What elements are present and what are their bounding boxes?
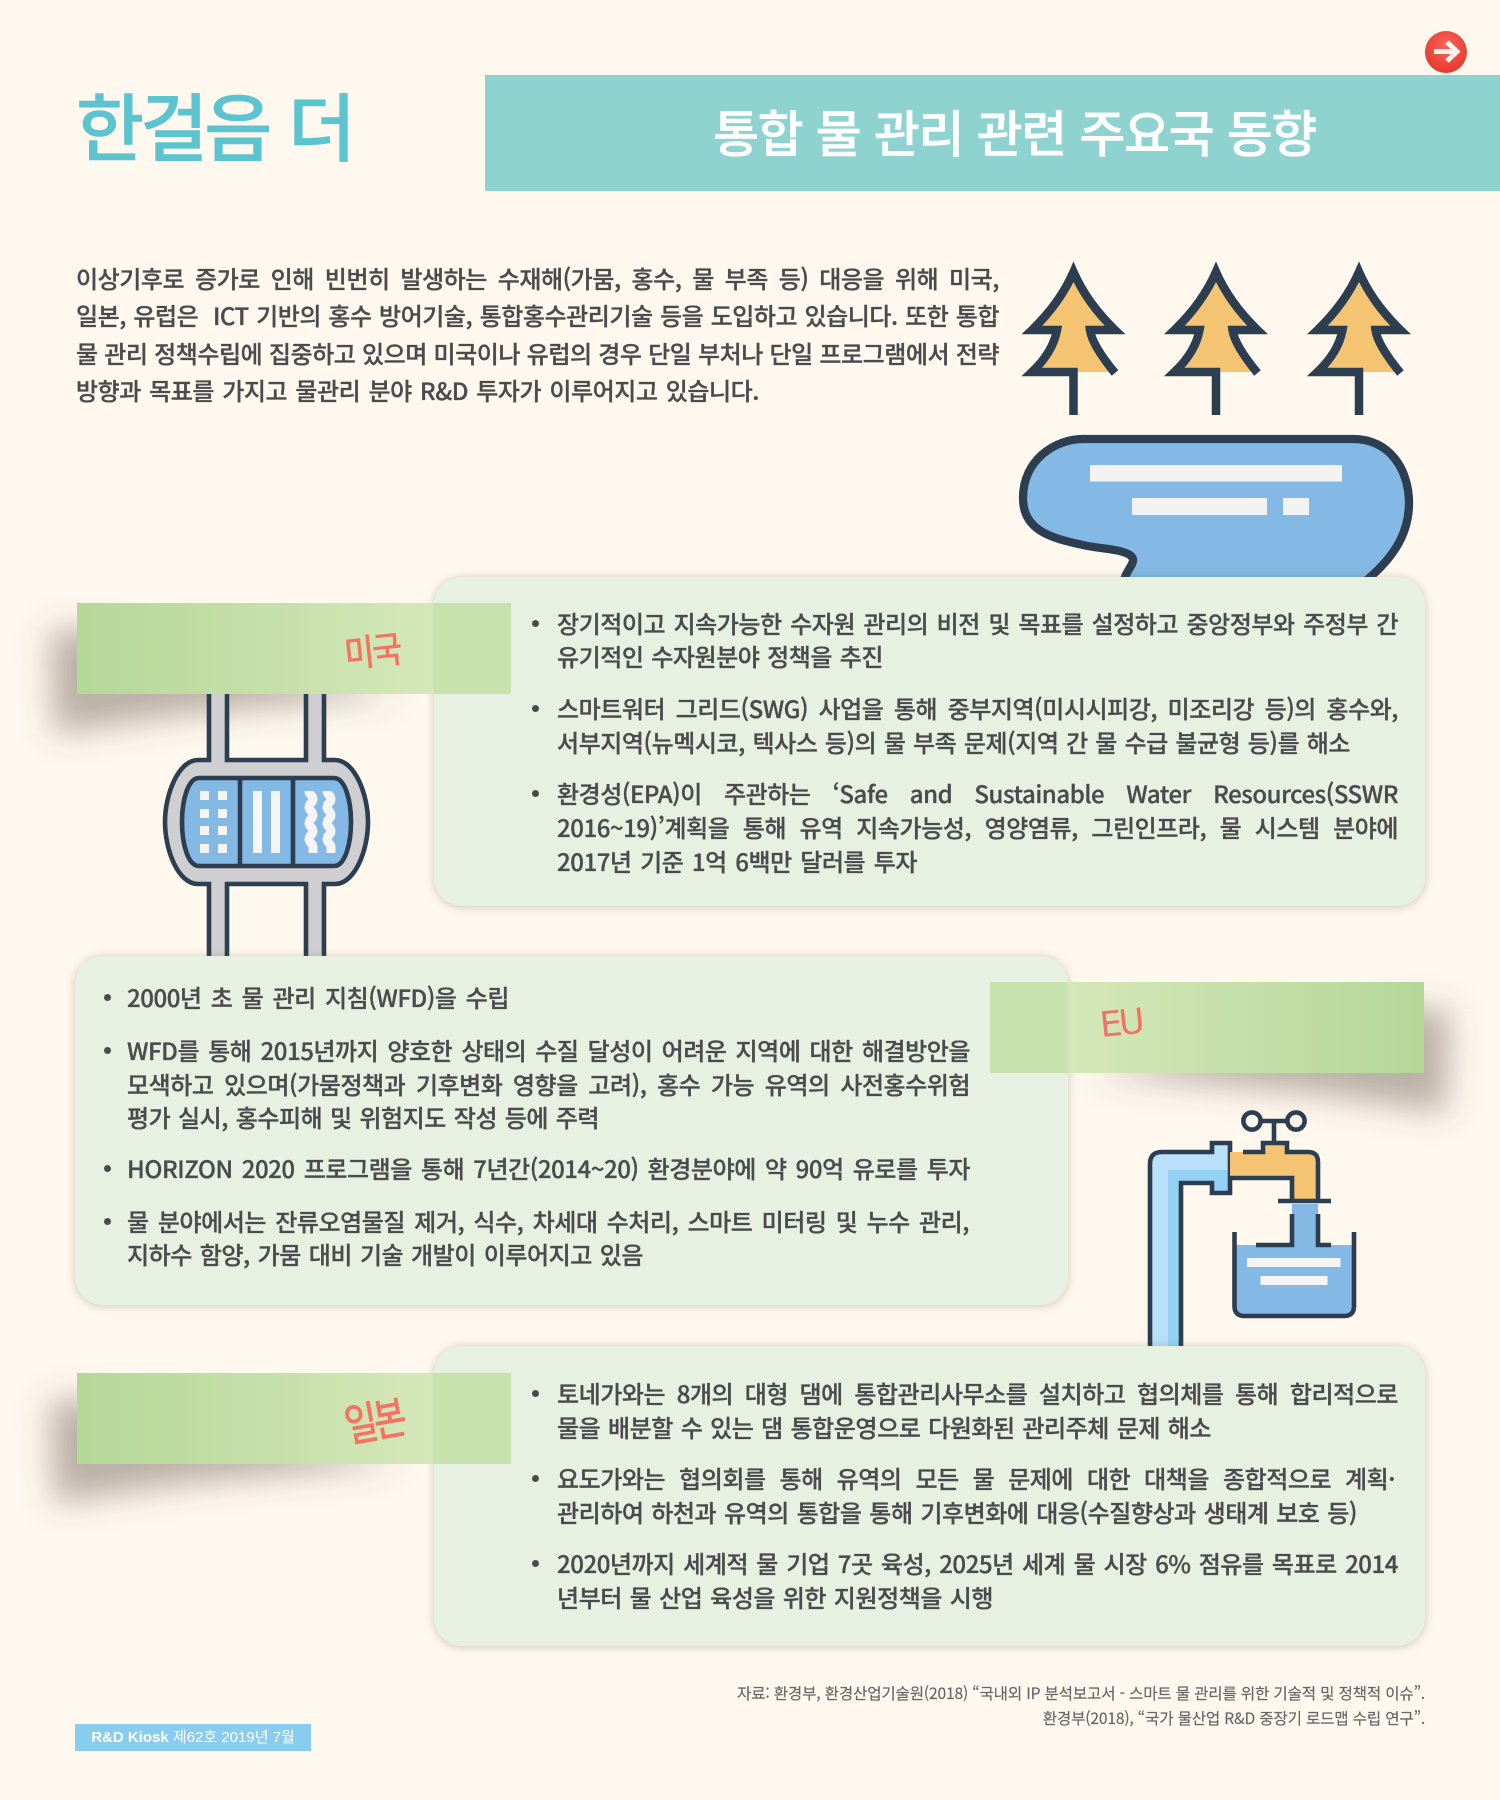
Japan bullet 1: 토네가와는 8개의 대형 댐에 통합관리사무소를 설치하고 협의체를 통해 합리적으로 — [557, 1375, 1398, 1410]
EU bullet 3: HORIZON 2020 프로그램을 통해 7년간(2014~20) 환경분야에 약 90억 유로를 투자 — [127, 1150, 970, 1185]
Japan bullet 3: 2020년까지 세계적 물 기업 7곳 육성, 2025년 세계 물 시장 6% 점유를 목표로 2014 — [557, 1545, 1398, 1580]
ribbon shadow: EU — [1090, 1009, 1450, 1113]
intro text: 방향과 목표를 가지고 물관리 분야 R&D 투자가 이루어지고 있습니다. — [76, 372, 759, 407]
USA bullet 1: 장기적이고 지속가능한 수자원 관리의 비전 및 목표를 설정하고 중앙정부와 주정부 간 — [557, 605, 1398, 640]
USA bullet 2 — [532, 690, 1398, 759]
USA bullet 3: 2017년 기준 1억 6백만 달러를 투자 — [557, 843, 917, 878]
Japan bullet 2: 관리하여 하천과 유역의 통합을 통해 기후변화에 대응(수질향상과 생태계 보호 등) — [557, 1494, 1357, 1529]
label: Japan: 일본 — [339, 1382, 407, 1456]
ribbon: Japan — [77, 1373, 511, 1464]
ribbon: EU — [990, 982, 1424, 1073]
USA bullet 2: 스마트워터 그리드(SWG) 사업을 통해 중부지역(미시시피강, 미조리강 등)의 홍수와, — [557, 690, 1398, 725]
USA bullet 1 — [532, 605, 1398, 673]
label: USA: 미국 — [341, 619, 402, 679]
EU bullet 2: WFD를 통해 2015년까지 양호한 상태의 수질 달성이 어려운 지역에 대한 해결방안을 — [127, 1032, 970, 1067]
intro text: 이상기후로 증가로 인해 빈번히 발생하는 수재해(가뭄, 홍수, 물 부족 등) 대응을 위해 미국, — [76, 260, 999, 295]
Japan bullet 1: 물을 배분할 수 있는 댐 통합운영으로 다원화된 관리주체 문제 해소 — [557, 1409, 1211, 1444]
EU bullet 2: 모색하고 있으며(가뭄정책과 기후변화 영향을 고려), 홍수 가능 유역의 사전홍수위험 — [127, 1066, 970, 1101]
USA bullet 3: 2016~19)’계획을 통해 유역 지속가능성, 영양염류, 그린인프라, 물 시스템 분야에 — [557, 809, 1398, 844]
USA bullet 1: 유기적인 수자원분야 정책을 추진 — [557, 638, 883, 673]
source note — [737, 1682, 1425, 1729]
Japan bullet 2 — [532, 1460, 1395, 1529]
intro text — [76, 260, 999, 407]
header band — [485, 75, 1500, 191]
source note: 자료: 환경부, 환경산업기술원(2018) “국내외 IP 분석보고서 - 스마트 물 관리를 위한 기술적 및 정책적 이슈”. — [737, 1682, 1425, 1704]
EU bullet 2: 평가 실시, 홍수피해 및 위험지도 작성 등에 주력 — [127, 1099, 599, 1134]
ribbon shadow: USA — [50, 630, 400, 734]
icon: next arrow — [1425, 31, 1467, 73]
Japan bullet 2: 요도가와는 협의회를 통해 유역의 모든 물 문제에 대한 대책을 종합적으로 계획· — [557, 1460, 1395, 1495]
USA bullet 2: 서부지역(뉴멕시코, 텍사스 등)의 물 부족 문제(지역 간 물 수급 불균형 등)를 해소 — [557, 724, 1350, 759]
panel: EU — [75, 956, 1068, 1305]
intro text: 일본, 유럽은 ICT 기반의 홍수 방어기술, 통합홍수관리기술 등을 도입하고 있습니다. 또한 통합 — [76, 297, 999, 332]
icon: faucet and tank — [1150, 1112, 1354, 1350]
issue badge: R&D Kiosk 제62호 2019년 7월 — [91, 1729, 295, 1746]
panel: USA — [434, 577, 1425, 906]
Japan bullet 3 — [532, 1545, 1398, 1614]
EU bullet 2 — [104, 1032, 970, 1134]
EU bullet 4: 물 분야에서는 잔류오염물질 제거, 식수, 차세대 수처리, 스마트 미터링 및 누수 관리, — [127, 1203, 969, 1238]
icon: trees — [1028, 268, 1404, 415]
icon: lake — [1023, 439, 1409, 584]
label: EU: EU — [1098, 1002, 1144, 1046]
icon: water filter — [165, 690, 368, 965]
issue badge — [75, 1724, 311, 1751]
EU bullet 4: 지하수 함양, 가뭄 대비 기술 개발이 이루어지고 있음 — [127, 1236, 643, 1271]
source note: 환경부(2018), “국가 물산업 R&D 중장기 로드맵 수립 연구”. — [1043, 1707, 1425, 1729]
intro text: 물 관리 정책수립에 집중하고 있으며 미국이나 유럽의 경우 단일 부처나 단일 프로그램에서 전략 — [76, 335, 999, 370]
panel: Japan — [434, 1346, 1425, 1646]
Japan bullet 1 — [532, 1375, 1398, 1444]
ribbon: USA — [77, 603, 511, 694]
ribbon shadow: Japan — [50, 1400, 400, 1503]
USA bullet 3: 환경성(EPA)이 주관하는 ‘Safe and Sustainable Water Resources(SSWR — [557, 775, 1398, 810]
Japan bullet 3: 년부터 물 산업 육성을 위한 지원정책을 시행 — [557, 1579, 993, 1614]
subtitle: 통합 물 관리 관련 주요국 동향 — [713, 95, 1316, 167]
title: 한걸음 더 — [76, 70, 352, 177]
EU bullet 4 — [104, 1203, 969, 1271]
EU bullet 1: 2000년 초 물 관리 지침(WFD)을 수립 — [127, 979, 509, 1014]
USA bullet 3 — [532, 775, 1398, 878]
